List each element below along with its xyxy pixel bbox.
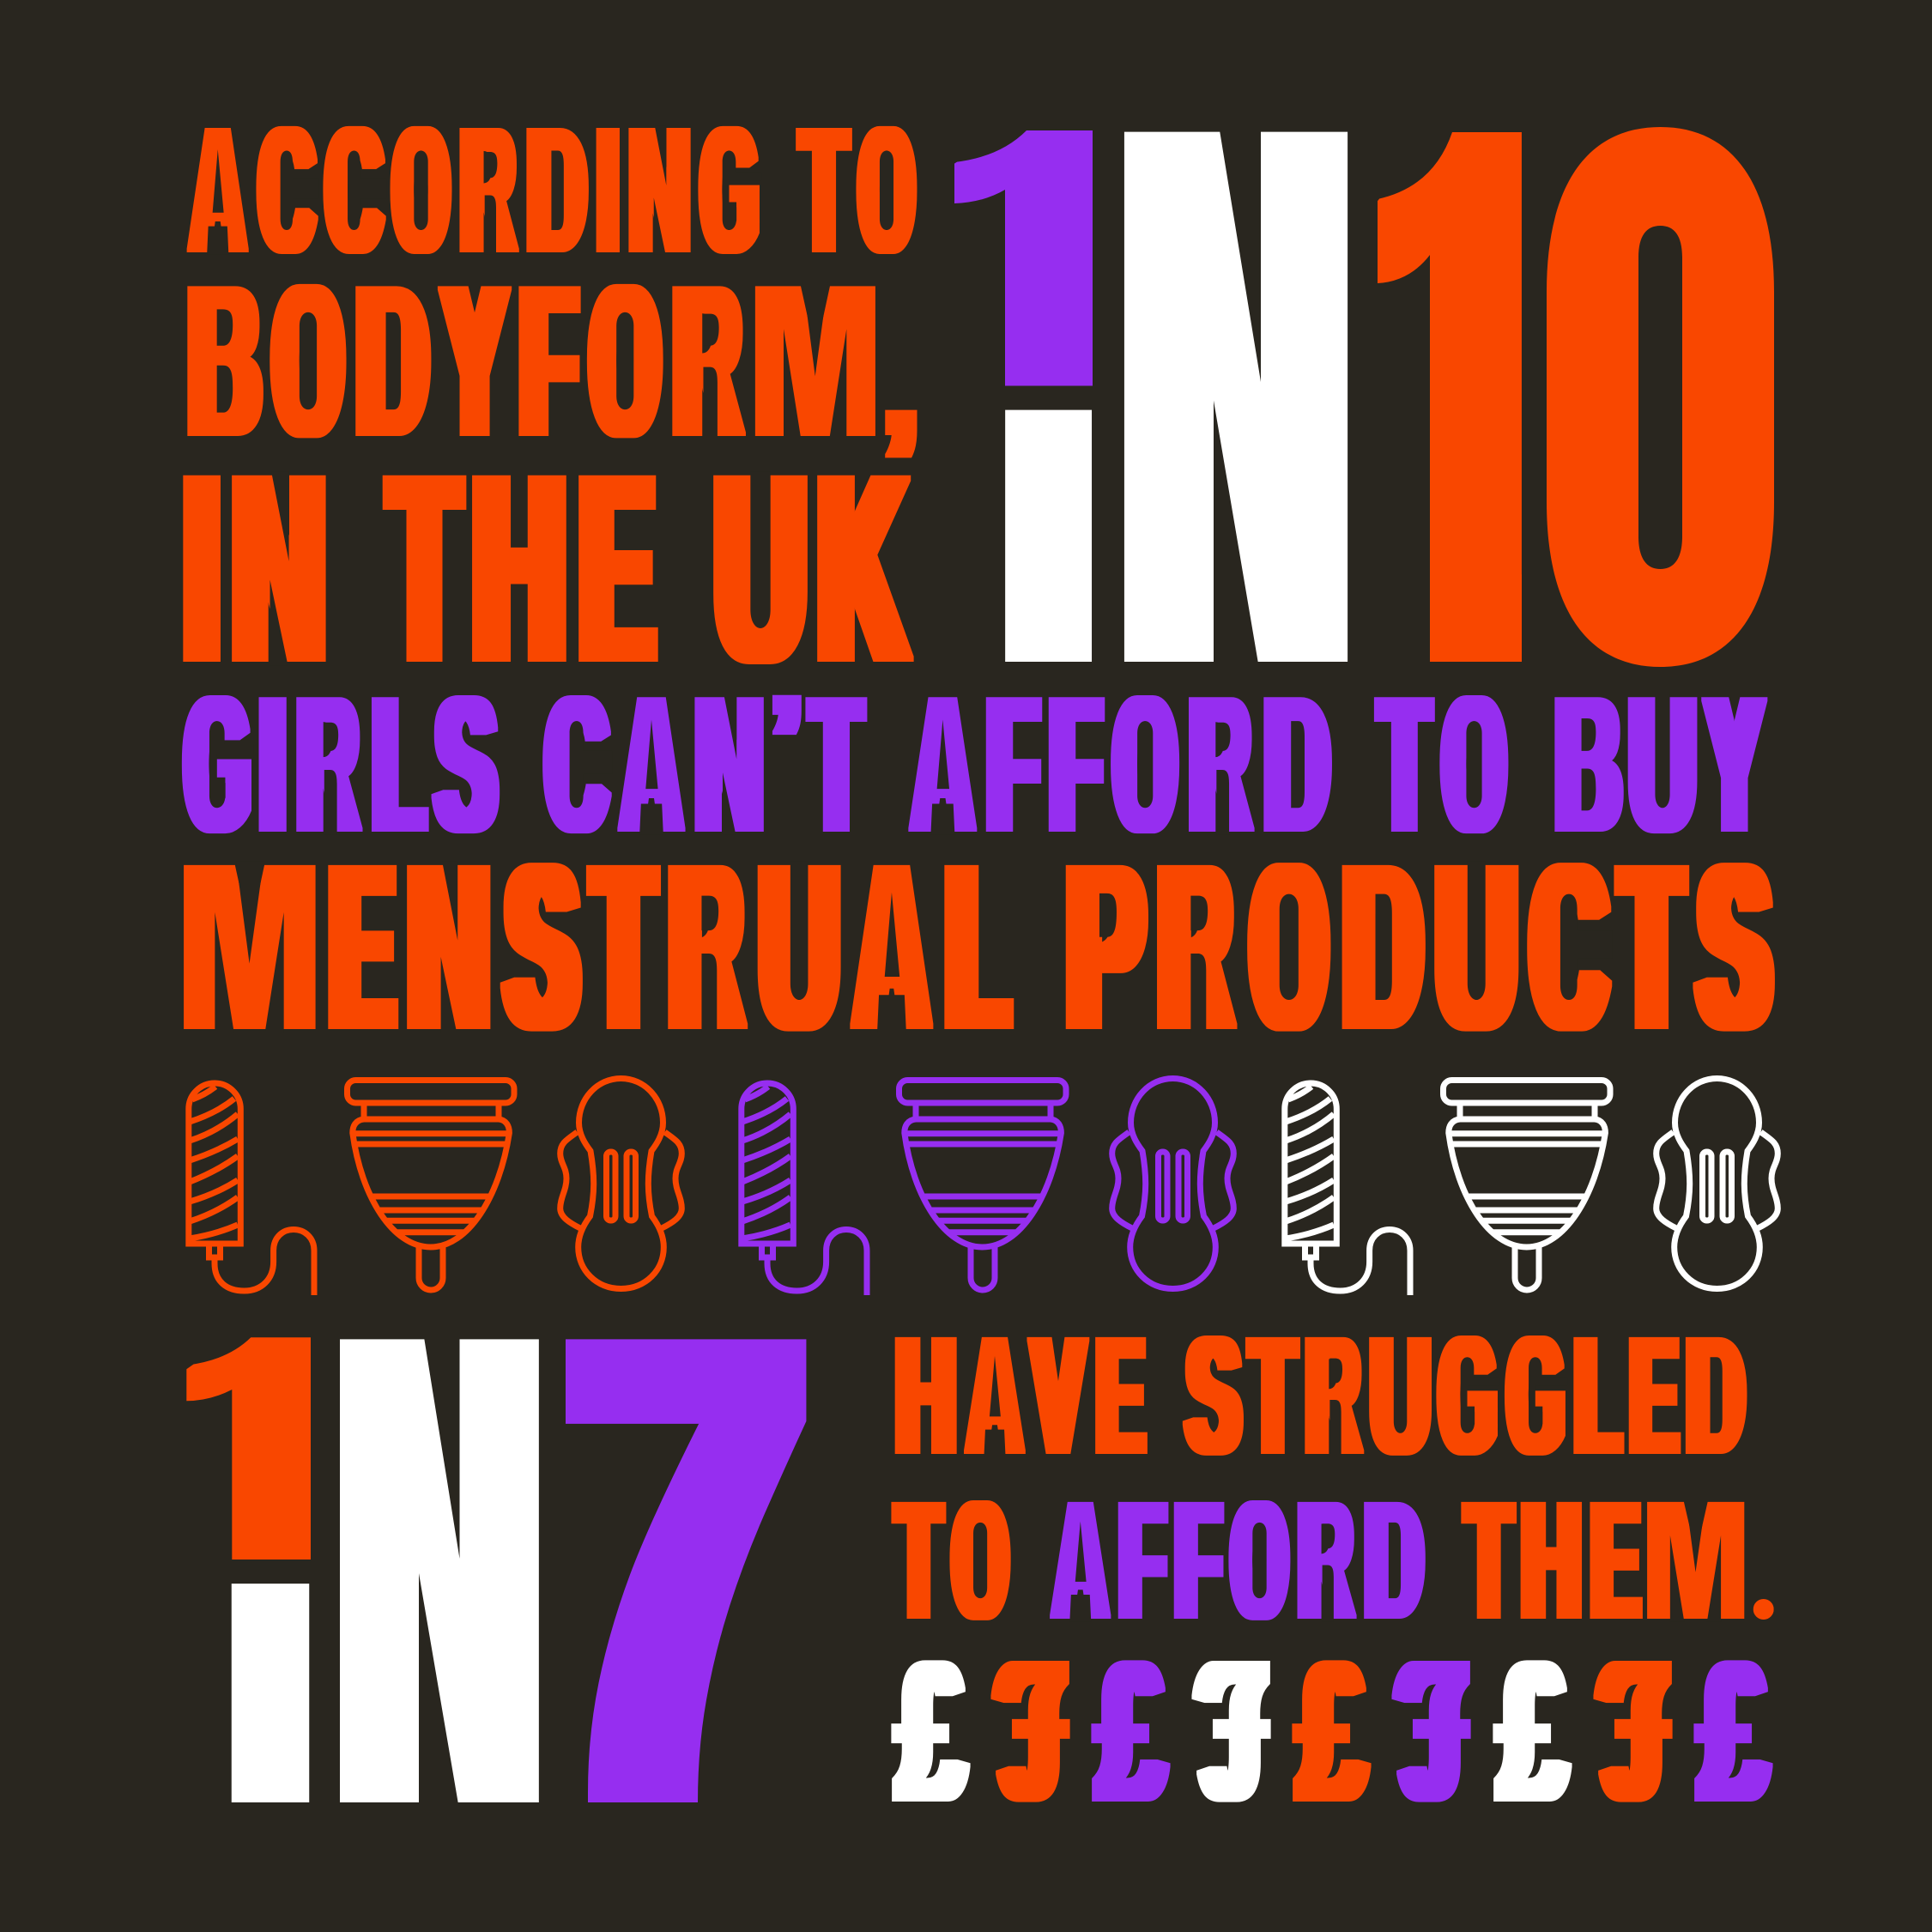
big statistic: 1 in 7: N <box>347 1202 532 1932</box>
row of pound signs: £ <box>1601 1620 1665 1841</box>
heading line: bodyform: B <box>190 241 259 480</box>
icon: orange tampon <box>189 1083 314 1295</box>
heading line: bodyform: D <box>358 241 427 480</box>
text line: girls can't afford to buy: T <box>812 658 860 871</box>
text line: have struggled: V <box>1033 1303 1083 1487</box>
heading line: according to: N <box>630 92 689 288</box>
text line: girls can't afford to buy: R <box>1191 658 1249 871</box>
heading line: according to: G <box>702 92 757 288</box>
text line: girls can't afford to buy: D <box>1266 658 1328 871</box>
text line: menstrual products: A <box>858 818 925 1076</box>
words: to afford them: A <box>1055 1468 1106 1652</box>
heading line: in the UK: H <box>474 421 565 716</box>
heading line: in the UK: T <box>391 421 457 716</box>
row of pound signs: £ <box>1399 1620 1463 1841</box>
icon: orange cup <box>347 1080 514 1290</box>
icon: white tampon <box>1285 1083 1410 1295</box>
text line: menstrual products: S <box>507 818 577 1076</box>
row of pound signs: £ <box>899 1621 963 1842</box>
text line: girls can't afford to buy <box>186 658 1761 871</box>
row of pound signs: £ <box>1500 1621 1565 1842</box>
icon row: menstrual products <box>189 1078 1778 1295</box>
icon: white pad <box>1656 1078 1778 1289</box>
words: to afford them: M <box>1646 1468 1746 1652</box>
text line: menstrual products: U <box>761 818 837 1076</box>
text line: have struggled: G <box>1440 1303 1495 1487</box>
text line: have struggled: G <box>1509 1303 1563 1487</box>
heading line: bodyform: Y <box>445 241 505 480</box>
heading line: according to: C <box>327 92 381 288</box>
row of pound signs: £ <box>1299 1621 1364 1842</box>
text line: menstrual products: O <box>1254 818 1324 1076</box>
text line: girls can't afford to buy: U <box>1630 658 1695 871</box>
text line: have struggled: H <box>896 1303 955 1487</box>
heading line: according to <box>192 92 913 288</box>
heading line: bodyform: O <box>275 241 342 480</box>
words: to afford them: O <box>1232 1468 1287 1652</box>
words: to afford them: H <box>1522 1468 1580 1652</box>
words: to afford them: O <box>954 1468 1007 1652</box>
text line: have struggled: U <box>1372 1303 1430 1487</box>
text line: menstrual products: E <box>332 818 391 1076</box>
text: K <box>820 421 905 716</box>
heading line: bodyform: R <box>675 241 739 480</box>
text line: have struggled: A <box>969 1303 1021 1487</box>
row of pound signs: £ <box>998 1620 1063 1841</box>
big statistic: 1 in 10 <box>942 0 1789 825</box>
heading line: in the UK: N <box>233 421 324 716</box>
heading line: according to: O <box>394 92 448 288</box>
text line: to afford them <box>898 1468 1771 1653</box>
heading line: according to: A <box>192 92 244 288</box>
purple numeral 1: 1 <box>942 57 1140 459</box>
text line: menstrual products: R <box>1161 818 1229 1076</box>
text: . <box>1757 1469 1771 1653</box>
text line: menstrual products: R <box>672 818 740 1076</box>
row of pound signs: £ <box>1099 1621 1163 1842</box>
text line: girls can't afford to buy: T <box>1381 658 1428 871</box>
text line: menstrual products: M <box>184 818 316 1076</box>
words: to afford them: D <box>1366 1468 1422 1652</box>
icon: purple tampon <box>742 1083 867 1295</box>
text line: have struggled: R <box>1307 1303 1359 1487</box>
heading line: according to: R <box>462 92 514 288</box>
text: Y <box>1708 658 1761 871</box>
row of pound signs <box>899 1620 1765 1842</box>
text line: girls can't afford to buy: G <box>186 658 249 871</box>
text line: girls can't afford to buy: C <box>547 658 606 871</box>
text line: girls can't afford to buy: O <box>1115 658 1175 871</box>
text line: girls can't afford to buy: A <box>623 658 680 871</box>
heading line: bodyform: O <box>592 241 658 480</box>
text line: girls can't afford to buy: ’ <box>773 669 800 813</box>
heading line: in the UK <box>185 421 905 716</box>
heading line: according to: D <box>528 92 585 288</box>
heading line: in the UK: E <box>582 421 652 716</box>
text line: girls can't afford to buy: I <box>261 658 284 871</box>
heading line: bodyform: , <box>887 302 916 465</box>
text line: menstrual products: C <box>1533 818 1605 1076</box>
text: D <box>1687 1303 1743 1487</box>
words: to afford them: R <box>1299 1468 1351 1652</box>
letter counters cut into the condensed type <box>207 126 1723 1804</box>
text line: girls can't afford to buy: N <box>696 658 762 871</box>
text line: have struggled: E <box>1098 1303 1143 1487</box>
text line: menstrual products: P <box>1069 818 1142 1076</box>
text line: have struggled: T <box>1251 1303 1294 1487</box>
heading line: according to: C <box>260 92 313 288</box>
icon: purple cup <box>899 1080 1066 1290</box>
text line: menstrual products: D <box>1346 818 1420 1076</box>
text line: girls can't afford to buy: L <box>374 658 424 871</box>
icon: white cup <box>1444 1080 1610 1290</box>
heading line: according to: T <box>802 92 846 288</box>
heading line: bodyform: M <box>754 241 876 480</box>
row of pound signs: £ <box>1701 1621 1765 1842</box>
text line: have struggled: S <box>1187 1303 1240 1487</box>
row of pound signs: £ <box>1199 1620 1263 1841</box>
text line: menstrual products: N <box>410 818 488 1076</box>
heading line: bodyform: F <box>522 241 575 480</box>
text: S <box>1700 818 1769 1076</box>
words: to afford them <box>898 1468 1746 1652</box>
icon: orange pad <box>560 1078 681 1289</box>
text line: girls can't afford to buy: F <box>989 658 1038 871</box>
purple numeral 7: 7 <box>540 1202 807 1932</box>
text line: menstrual products: L <box>948 818 1007 1076</box>
text line: menstrual products <box>184 818 1769 1076</box>
text line: have struggled: L <box>1576 1303 1620 1487</box>
text: O <box>860 92 913 288</box>
icon: purple pad <box>1112 1078 1233 1289</box>
text line: have struggled: E <box>1631 1303 1677 1487</box>
text line: girls can't afford to buy: A <box>914 658 972 871</box>
orange numeral 1: 1 <box>185 1275 344 1620</box>
heading line: in the UK: I <box>185 421 218 716</box>
text line: girls can't afford to buy: F <box>1051 658 1100 871</box>
words: to afford them: F <box>1120 1468 1164 1652</box>
text line: girls can't afford to buy: O <box>1444 658 1504 871</box>
text line: menstrual products: U <box>1438 818 1515 1076</box>
text line: menstrual products: T <box>1623 818 1680 1076</box>
words: to afford them: F <box>1176 1468 1220 1652</box>
words: to afford them: E <box>1592 1468 1638 1652</box>
words: to afford them: T <box>1467 1468 1511 1652</box>
text line: girls can't afford to buy: R <box>299 658 357 871</box>
white letter I: I <box>235 1523 306 1862</box>
heading line: bodyform <box>190 241 916 480</box>
text line: menstrual products: T <box>596 818 651 1076</box>
words: to afford them: T <box>898 1468 940 1652</box>
white letter I: I <box>1005 339 1093 731</box>
text line: girls can't afford to buy: B <box>1557 658 1620 871</box>
text line: girls can't afford to buy: S <box>436 658 495 871</box>
heading line: according to: I <box>598 92 617 288</box>
heading line: in the UK: U <box>717 421 805 716</box>
text line: have struggled <box>896 1303 1743 1487</box>
